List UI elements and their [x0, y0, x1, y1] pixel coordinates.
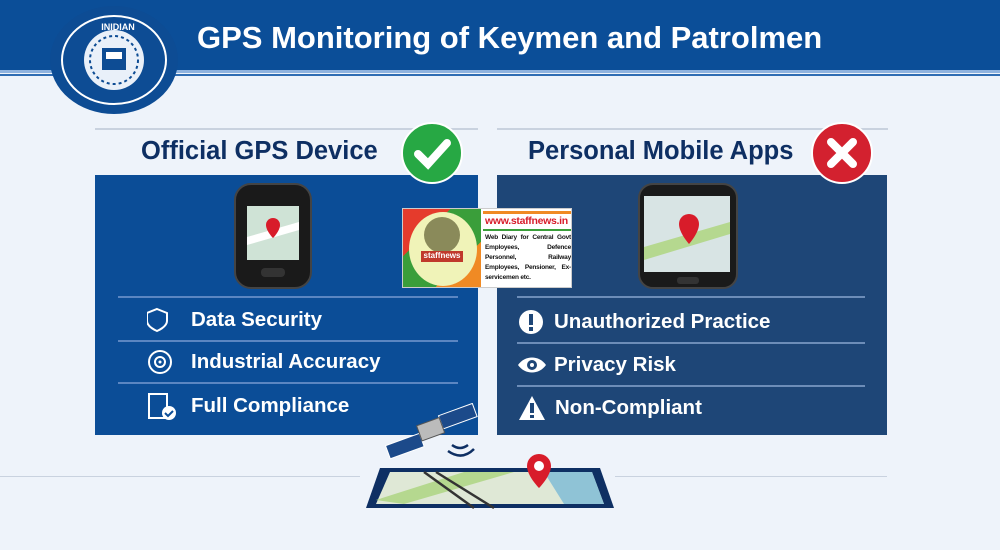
panel: official — [95, 175, 478, 435]
item: full compliance: Full Compliance — [191, 394, 349, 417]
item: full compliance — [148, 393, 349, 420]
phone — [638, 183, 738, 289]
staffnews badge: staffnews — [424, 251, 460, 260]
item: industrial accuracy: Industrial Accuracy — [191, 350, 381, 373]
item: unauthorized: Unauthorized Practice — [554, 310, 770, 333]
device — [234, 183, 312, 289]
icon: check — [401, 122, 463, 184]
satellite — [385, 403, 478, 460]
staffnews badge — [402, 208, 572, 288]
item: non-compliant: Non-Compliant — [555, 396, 702, 419]
heading: official: Official GPS Device — [141, 137, 378, 165]
icon: cross — [811, 122, 873, 184]
logo — [51, 15, 177, 114]
logo: INIDIAN — [101, 22, 135, 32]
item: data security — [147, 308, 322, 332]
section lines — [95, 128, 478, 130]
map — [366, 454, 614, 509]
item: data security: Data Security — [191, 308, 322, 331]
heading: personal: Personal Mobile Apps — [528, 137, 793, 165]
panel: personal — [497, 175, 887, 435]
staffnews badge: Web Diary for Central Govt Employees, Defence Personnel, Railway Employees, Pensioner, Ex-servicemen etc. — [485, 234, 571, 281]
item: privacy: Privacy Risk — [554, 353, 676, 376]
header band — [0, 0, 1000, 70]
staffnews badge: www.staffnews.in — [485, 215, 568, 227]
title: GPS Monitoring of Keymen and Patrolmen — [197, 20, 822, 55]
